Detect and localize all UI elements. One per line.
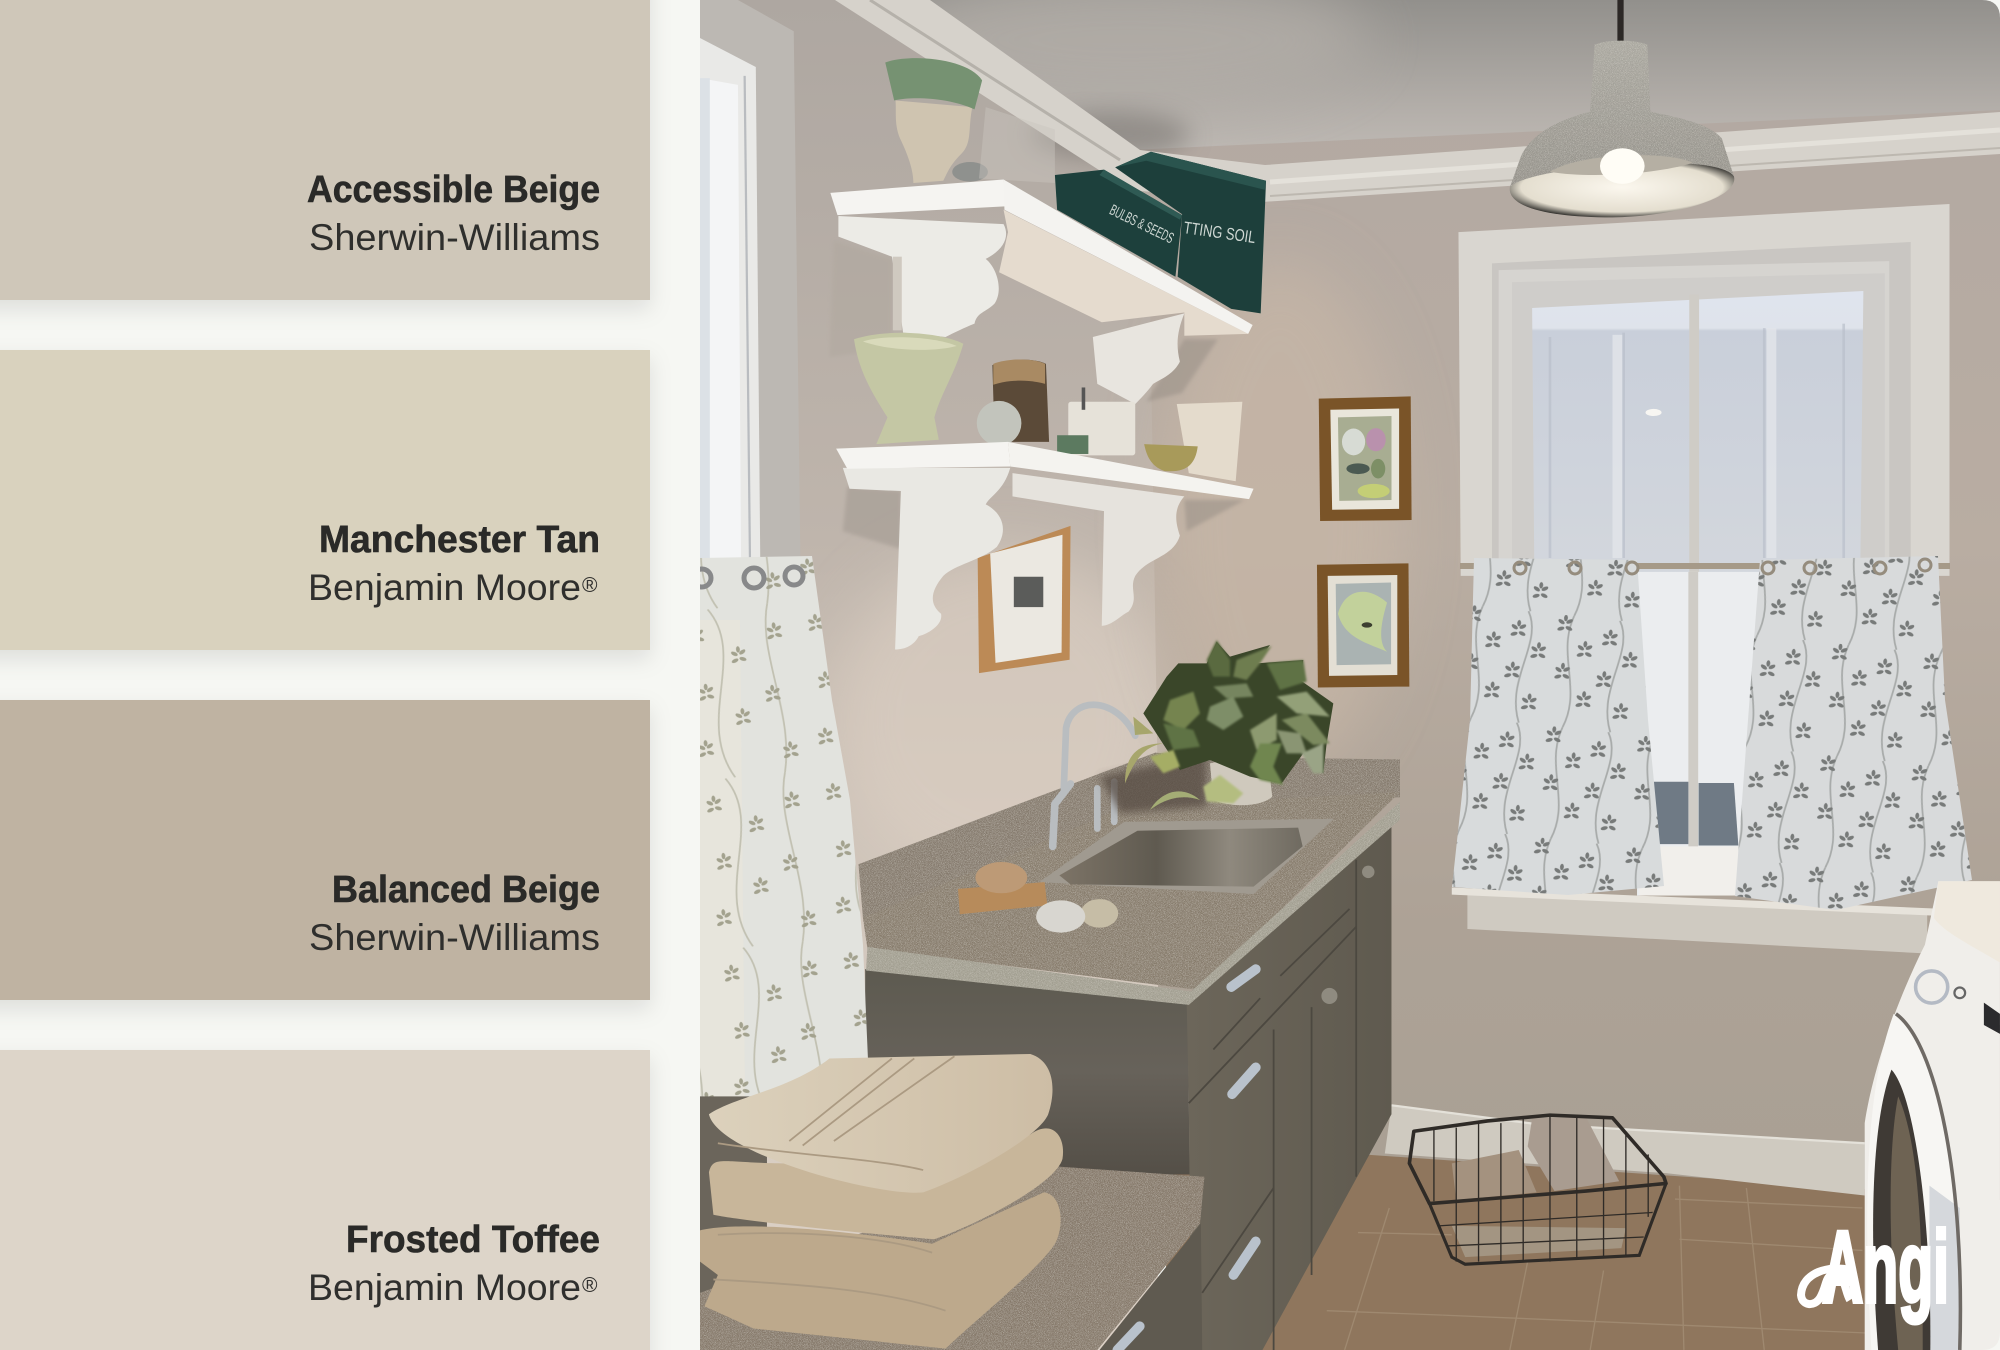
terracotta white pot [1177, 402, 1242, 481]
round tins [1036, 899, 1118, 933]
lower shelf [836, 442, 1254, 650]
back wall [1130, 110, 2000, 1200]
photo: laundry room [693, 0, 2000, 1350]
panel: paint colour swatches [0, 0, 650, 1350]
upper storage boxes [1055, 152, 1266, 313]
swatch: Frosted Toffee: ® [582, 1274, 598, 1297]
bulb [1600, 148, 1645, 184]
lower counter [700, 1166, 1204, 1350]
swatch: Accessible Beige: Accessible Beige [307, 169, 600, 211]
swatch: Manchester Tan: Manchester Tan [319, 519, 600, 561]
door window [1873, 1070, 1930, 1350]
basket wires [1409, 1115, 1666, 1264]
window sill [1452, 887, 1943, 954]
crown moulding [835, 0, 2000, 202]
cabinet handles [1231, 866, 1375, 1275]
cabinets [865, 822, 1391, 1350]
framed art: oak frame below shelf [978, 526, 1071, 673]
curtain rod [1460, 563, 1950, 569]
folded towels in basket [1452, 1116, 1626, 1257]
box label: potting soil: TTING SOIL [1182, 218, 1257, 247]
counter front edge [866, 802, 1400, 1005]
shade [1510, 41, 1734, 187]
right window [1458, 204, 1950, 580]
bottom towel [700, 1192, 1061, 1349]
pale green urn [854, 333, 963, 444]
swatch: Frosted Toffee: Frosted Toffee [346, 1219, 600, 1261]
frame: upper print [1319, 396, 1412, 521]
shelves [829, 58, 1266, 650]
swatch: Accessible Beige: Sherwin-Williams [309, 217, 600, 258]
wire basket [1409, 1115, 1666, 1264]
brown ceramic mug [992, 360, 1049, 442]
white cup with press [1068, 402, 1135, 455]
soap dish [958, 862, 1047, 914]
pendant lamp [1510, 0, 1734, 217]
trailing leaves [1125, 717, 1200, 810]
backsplash [858, 753, 1400, 918]
washer body [1865, 881, 2000, 1350]
box label: bulbs and seeds: BULBS & SEEDS [1107, 202, 1176, 247]
ceiling [930, 0, 2000, 150]
cord [1617, 0, 1624, 42]
plant pot [1210, 752, 1272, 805]
foliage mass [1143, 642, 1333, 783]
stacked towels [700, 1054, 1063, 1349]
washing machine [1865, 881, 2000, 1350]
curtain: left panel [1452, 558, 1664, 895]
cabinet details [1189, 860, 1356, 1350]
middle towel [709, 1128, 1063, 1239]
small yellow bowl [1144, 444, 1198, 471]
baseboard [1385, 1105, 1865, 1196]
leaves [1150, 640, 1330, 803]
swatch: Manchester Tan: Benjamin Moore [308, 567, 581, 608]
faucet [1053, 705, 1135, 846]
sink [1039, 819, 1334, 894]
countertop with sink [858, 705, 1400, 1005]
swatch: Balanced Beige: Sherwin-Williams [309, 917, 600, 958]
counter surface [863, 792, 1400, 990]
green and cream urn [885, 58, 988, 183]
cabinet side panel [865, 969, 1190, 1175]
swatch: Balanced Beige [0, 700, 650, 1000]
plant shadow [1100, 753, 1207, 813]
swatch: Balanced Beige: Balanced Beige [332, 869, 600, 911]
swatch: Accessible Beige [0, 0, 650, 300]
curtain grommets [693, 567, 803, 588]
swatch: Frosted Toffee: Benjamin Moore [308, 1267, 581, 1308]
lower shelf items [854, 333, 1242, 481]
floor [1166, 1154, 1880, 1350]
swatch: Manchester Tan [0, 350, 650, 650]
display [1984, 1003, 2000, 1034]
potted plant [1100, 640, 1333, 813]
green trinket [1057, 435, 1088, 454]
swatch: Frosted Toffee [0, 1050, 650, 1350]
upper shelf [830, 179, 1253, 404]
shade interior [1510, 163, 1734, 217]
window lower opening [1637, 572, 1760, 896]
glass ball [977, 401, 1021, 446]
framed art: botanical prints [1317, 396, 1412, 687]
control dial [1916, 971, 1948, 1003]
lower counter with stacked towels [700, 1054, 1204, 1350]
right window curtains [1452, 556, 1972, 910]
top towel [709, 1054, 1053, 1193]
swatch: Manchester Tan: ® [582, 574, 598, 597]
curtain: right panel [1735, 556, 1972, 910]
frame: lower print [1317, 563, 1409, 687]
inner shade shadow [1550, 155, 1693, 175]
glass jar [979, 107, 1055, 183]
lower cabinet [1100, 1224, 1202, 1350]
cabinet front [1187, 822, 1391, 1350]
left curtain [693, 556, 868, 1112]
dark gap under curtain [700, 1096, 767, 1350]
door ring [1867, 1014, 1960, 1350]
shelf shadows [829, 241, 1245, 549]
curtain rings [1514, 559, 1931, 574]
left wall [700, 0, 1158, 1350]
logo: Angi [1801, 1210, 1949, 1324]
left window and trim [700, 0, 800, 565]
washer top [1934, 881, 2000, 962]
